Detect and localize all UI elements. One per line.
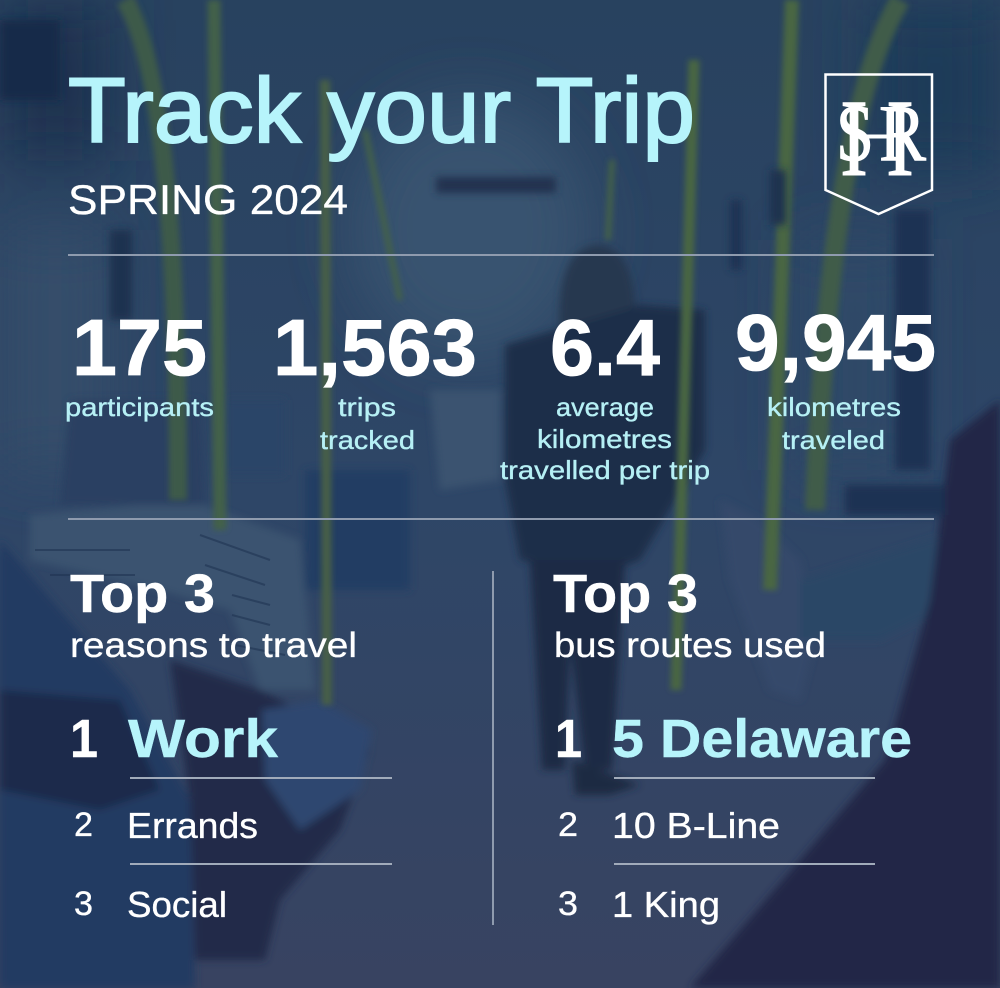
stat: trips tracked: 1,563 [273, 303, 477, 392]
rank 1: Work: Work [128, 709, 279, 769]
panel: top 3 reasons to travel [70, 564, 392, 925]
rank 1: 5 Delaware: 5 Delaware [612, 709, 912, 769]
rank 3: Social: 3 [74, 885, 93, 923]
shirt stripes [35, 535, 285, 655]
logo: SHR monogram shield: I [886, 77, 914, 199]
stat: kilometres traveled: traveled [782, 425, 885, 455]
logo: SHR monogram shield: I [840, 77, 868, 199]
logo: SHR monogram shield: S [836, 90, 874, 178]
rank 2: 10 B-Line: 2 [558, 806, 578, 844]
rank 2: Errands [74, 805, 258, 846]
stat: average kilometres per trip: average [556, 392, 654, 422]
heading: reasons [70, 564, 357, 665]
stat: participants: 175 [72, 303, 207, 392]
stat: trips tracked [273, 303, 477, 455]
stat: trips tracked: tracked [320, 425, 415, 455]
heading: routes [553, 564, 826, 665]
logo: SHR monogram shield [826, 74, 932, 214]
stat: average kilometres per trip: 6.4 [550, 303, 660, 392]
rank 2: 10 B-Line [558, 805, 780, 846]
panel: top 3 bus routes used [553, 564, 912, 925]
rank 3: 1 King: 1 King [612, 884, 720, 925]
heading: reasons: Top 3 [70, 564, 215, 624]
rank 2: 10 B-Line: 10 B-Line [612, 805, 780, 846]
stat: trips tracked: trips [338, 392, 396, 422]
rank 3: 1 King: 3 [558, 885, 578, 923]
stat: kilometres traveled: kilometres [767, 392, 901, 422]
heading: routes: Top 3 [553, 564, 698, 624]
stat: average kilometres per trip [500, 303, 710, 485]
rank 3: Social: Social [127, 884, 227, 925]
stat: kilometres traveled [735, 298, 936, 455]
rank 1: Work: 1 [70, 709, 98, 769]
shapes keep moderately sharp edges [0, 245, 1000, 988]
stat: average kilometres per trip: kilometres [537, 424, 672, 454]
heading: routes: bus routes used [554, 626, 826, 665]
stat: average kilometres per trip: travelled per trip [500, 455, 710, 485]
rank 2: Errands: 2 [74, 806, 93, 844]
title: Track your Trip [68, 60, 695, 162]
rank 1: 5 Delaware: 1 [555, 709, 582, 769]
heading: reasons: reasons to travel [70, 626, 357, 665]
rank 1: Work [70, 709, 279, 769]
logo: SHR monogram shield: R [879, 90, 927, 178]
rank 2: Errands: Errands [127, 805, 258, 846]
subtitle: SPRING 2024 [68, 176, 348, 223]
stat: kilometres traveled: 9,945 [735, 298, 936, 387]
divider [68, 518, 934, 520]
stat: participants: participants [65, 392, 214, 422]
rank 3: Social [74, 884, 227, 925]
rank 3: 1 King [558, 884, 720, 925]
stat: participants [65, 303, 214, 422]
divider [68, 254, 934, 256]
